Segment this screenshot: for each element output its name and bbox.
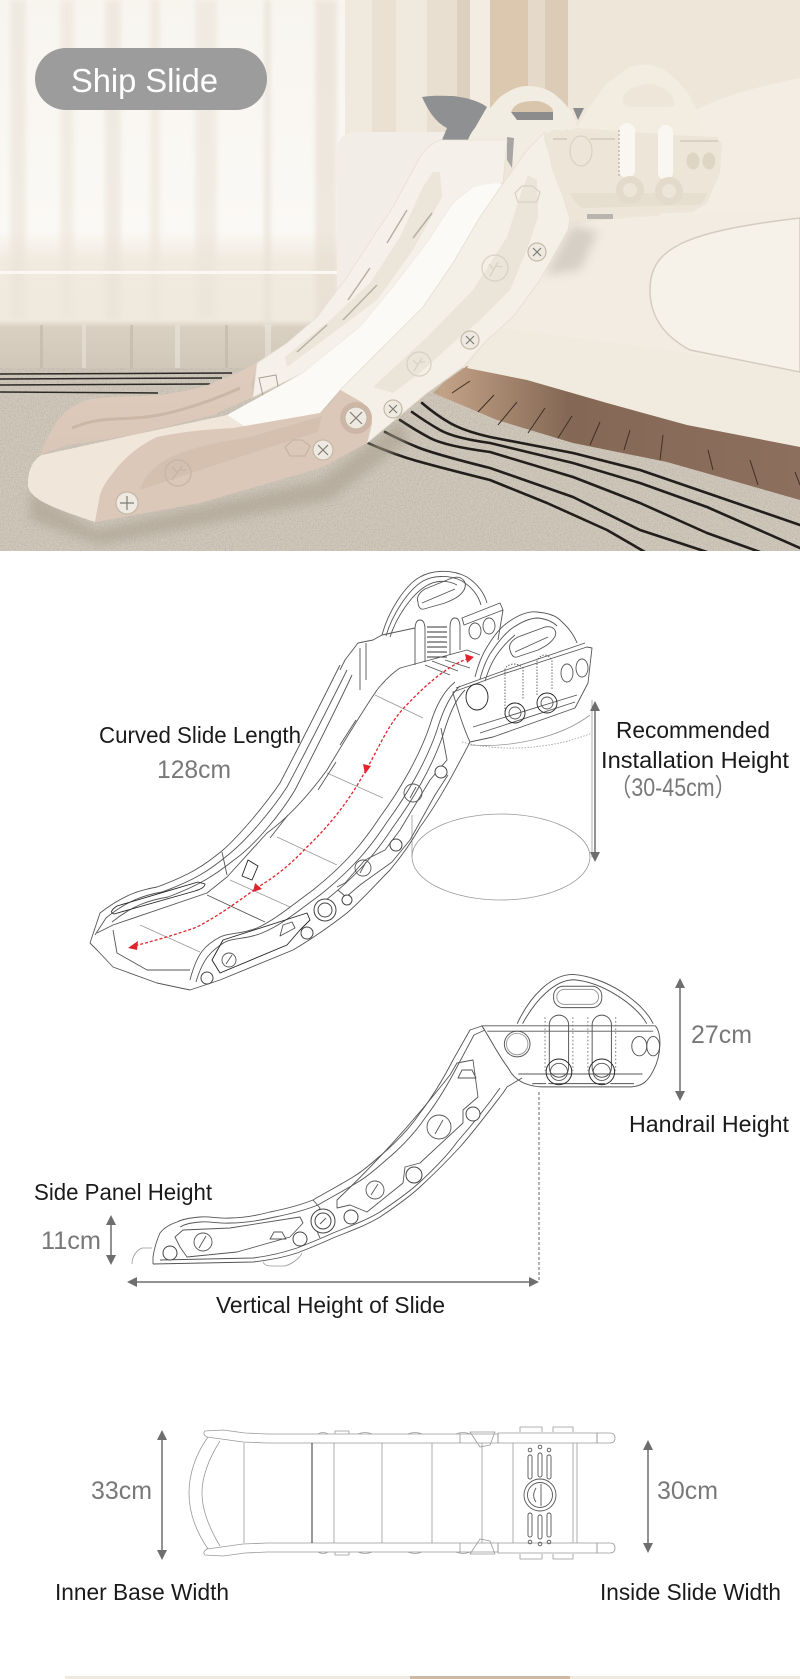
curved length red dashed arrow	[128, 654, 474, 950]
icon: ship hull	[545, 130, 722, 217]
side rail inner panels	[175, 1060, 478, 1257]
arrow: inside slide width	[643, 1440, 653, 1553]
icon: ship handrail arch	[577, 65, 705, 137]
icon: grey shark fin toy	[422, 96, 487, 140]
side rail outline	[153, 1026, 522, 1264]
arrow: installation height	[590, 701, 600, 862]
photo: wall and curtains	[0, 0, 800, 368]
slide deck and cross lines	[140, 650, 480, 952]
arrow: inner base width	[157, 1430, 167, 1560]
icon: screws on rail	[116, 243, 546, 514]
icon: square mark on joint	[259, 375, 279, 396]
photo: shadow under slide	[30, 420, 410, 545]
label: curved slide length: Curved Slide Length	[99, 722, 301, 748]
label: recommended installation height	[601, 717, 790, 773]
label: handrail height: Handrail Height	[629, 1111, 790, 1137]
far rail	[90, 665, 377, 943]
label: recommended installation height: Recommended	[616, 717, 770, 743]
arrow: vertical height of slide	[127, 1092, 539, 1287]
photo: wooden floor	[433, 366, 800, 500]
near rail	[90, 682, 470, 990]
slide: base pad	[28, 415, 247, 522]
far handrail handle	[417, 577, 465, 609]
photo: carpet	[0, 368, 800, 551]
slide: far rail groove	[72, 388, 240, 428]
slide: far rail recess and slots	[285, 172, 442, 367]
badge: Ship Slide pill: Ship Slide	[71, 62, 218, 99]
slide: taupe panel recess	[140, 416, 322, 490]
value: 27cm: 27cm	[691, 1021, 752, 1049]
value: 128cm: 128cm	[157, 756, 231, 784]
label: vertical height of slide: Vertical Height of Slide	[216, 1292, 445, 1318]
value: 33cm: 33cm	[91, 1477, 152, 1505]
slide: near rail	[340, 132, 570, 443]
far ladder and portholes	[340, 603, 503, 690]
slide: near rail recess	[373, 175, 538, 393]
value: 30cm: 30cm	[657, 1477, 718, 1505]
value: 30-45cm: （30-45cm）	[610, 774, 736, 802]
diagram: top view slide line drawing	[189, 1427, 615, 1559]
top view rails	[189, 1427, 615, 1559]
near ship handrail	[453, 612, 592, 742]
panel: product photo	[0, 0, 800, 552]
icon: far handrail opening	[507, 101, 584, 168]
slide: near rail taupe end	[95, 390, 372, 522]
screws and logos	[201, 766, 447, 984]
value: 11cm: 11cm	[41, 1227, 101, 1255]
icon: handrail opening	[623, 84, 675, 107]
side base pads	[132, 1248, 302, 1266]
photo edge strip at bottom	[65, 1676, 800, 1679]
diagram: side view slide line drawing	[132, 974, 660, 1266]
icon: tree logos and boat marks	[165, 186, 540, 486]
cylinder cushion outline	[412, 700, 592, 900]
photo: sofa	[337, 132, 800, 447]
ship deck slots and wheel	[524, 1445, 556, 1546]
label: side panel height: Side Panel Height	[34, 1179, 213, 1205]
badge: Ship Slide pill	[35, 48, 267, 110]
slide: far rail	[253, 140, 507, 397]
arrow: side panel height	[106, 1215, 116, 1265]
far handrail arch	[382, 571, 487, 637]
diagram: perspective slide line drawing	[90, 571, 592, 990]
slide: sliding surface	[227, 183, 502, 428]
icon: far ship handrail	[468, 86, 577, 172]
label: recommended installation height: Installation Height	[601, 747, 790, 773]
side rail screws and logos	[163, 1070, 480, 1260]
slide: far rail taupe end	[40, 363, 257, 455]
photo: carpet stripes	[368, 403, 800, 552]
label: inside slide width: Inside Slide Width	[600, 1579, 781, 1605]
icon: hull details	[553, 123, 718, 219]
arrow: handrail height	[675, 978, 685, 1101]
side ship handrail and hull	[482, 974, 660, 1087]
label: inner base width: Inner Base Width	[55, 1579, 229, 1605]
